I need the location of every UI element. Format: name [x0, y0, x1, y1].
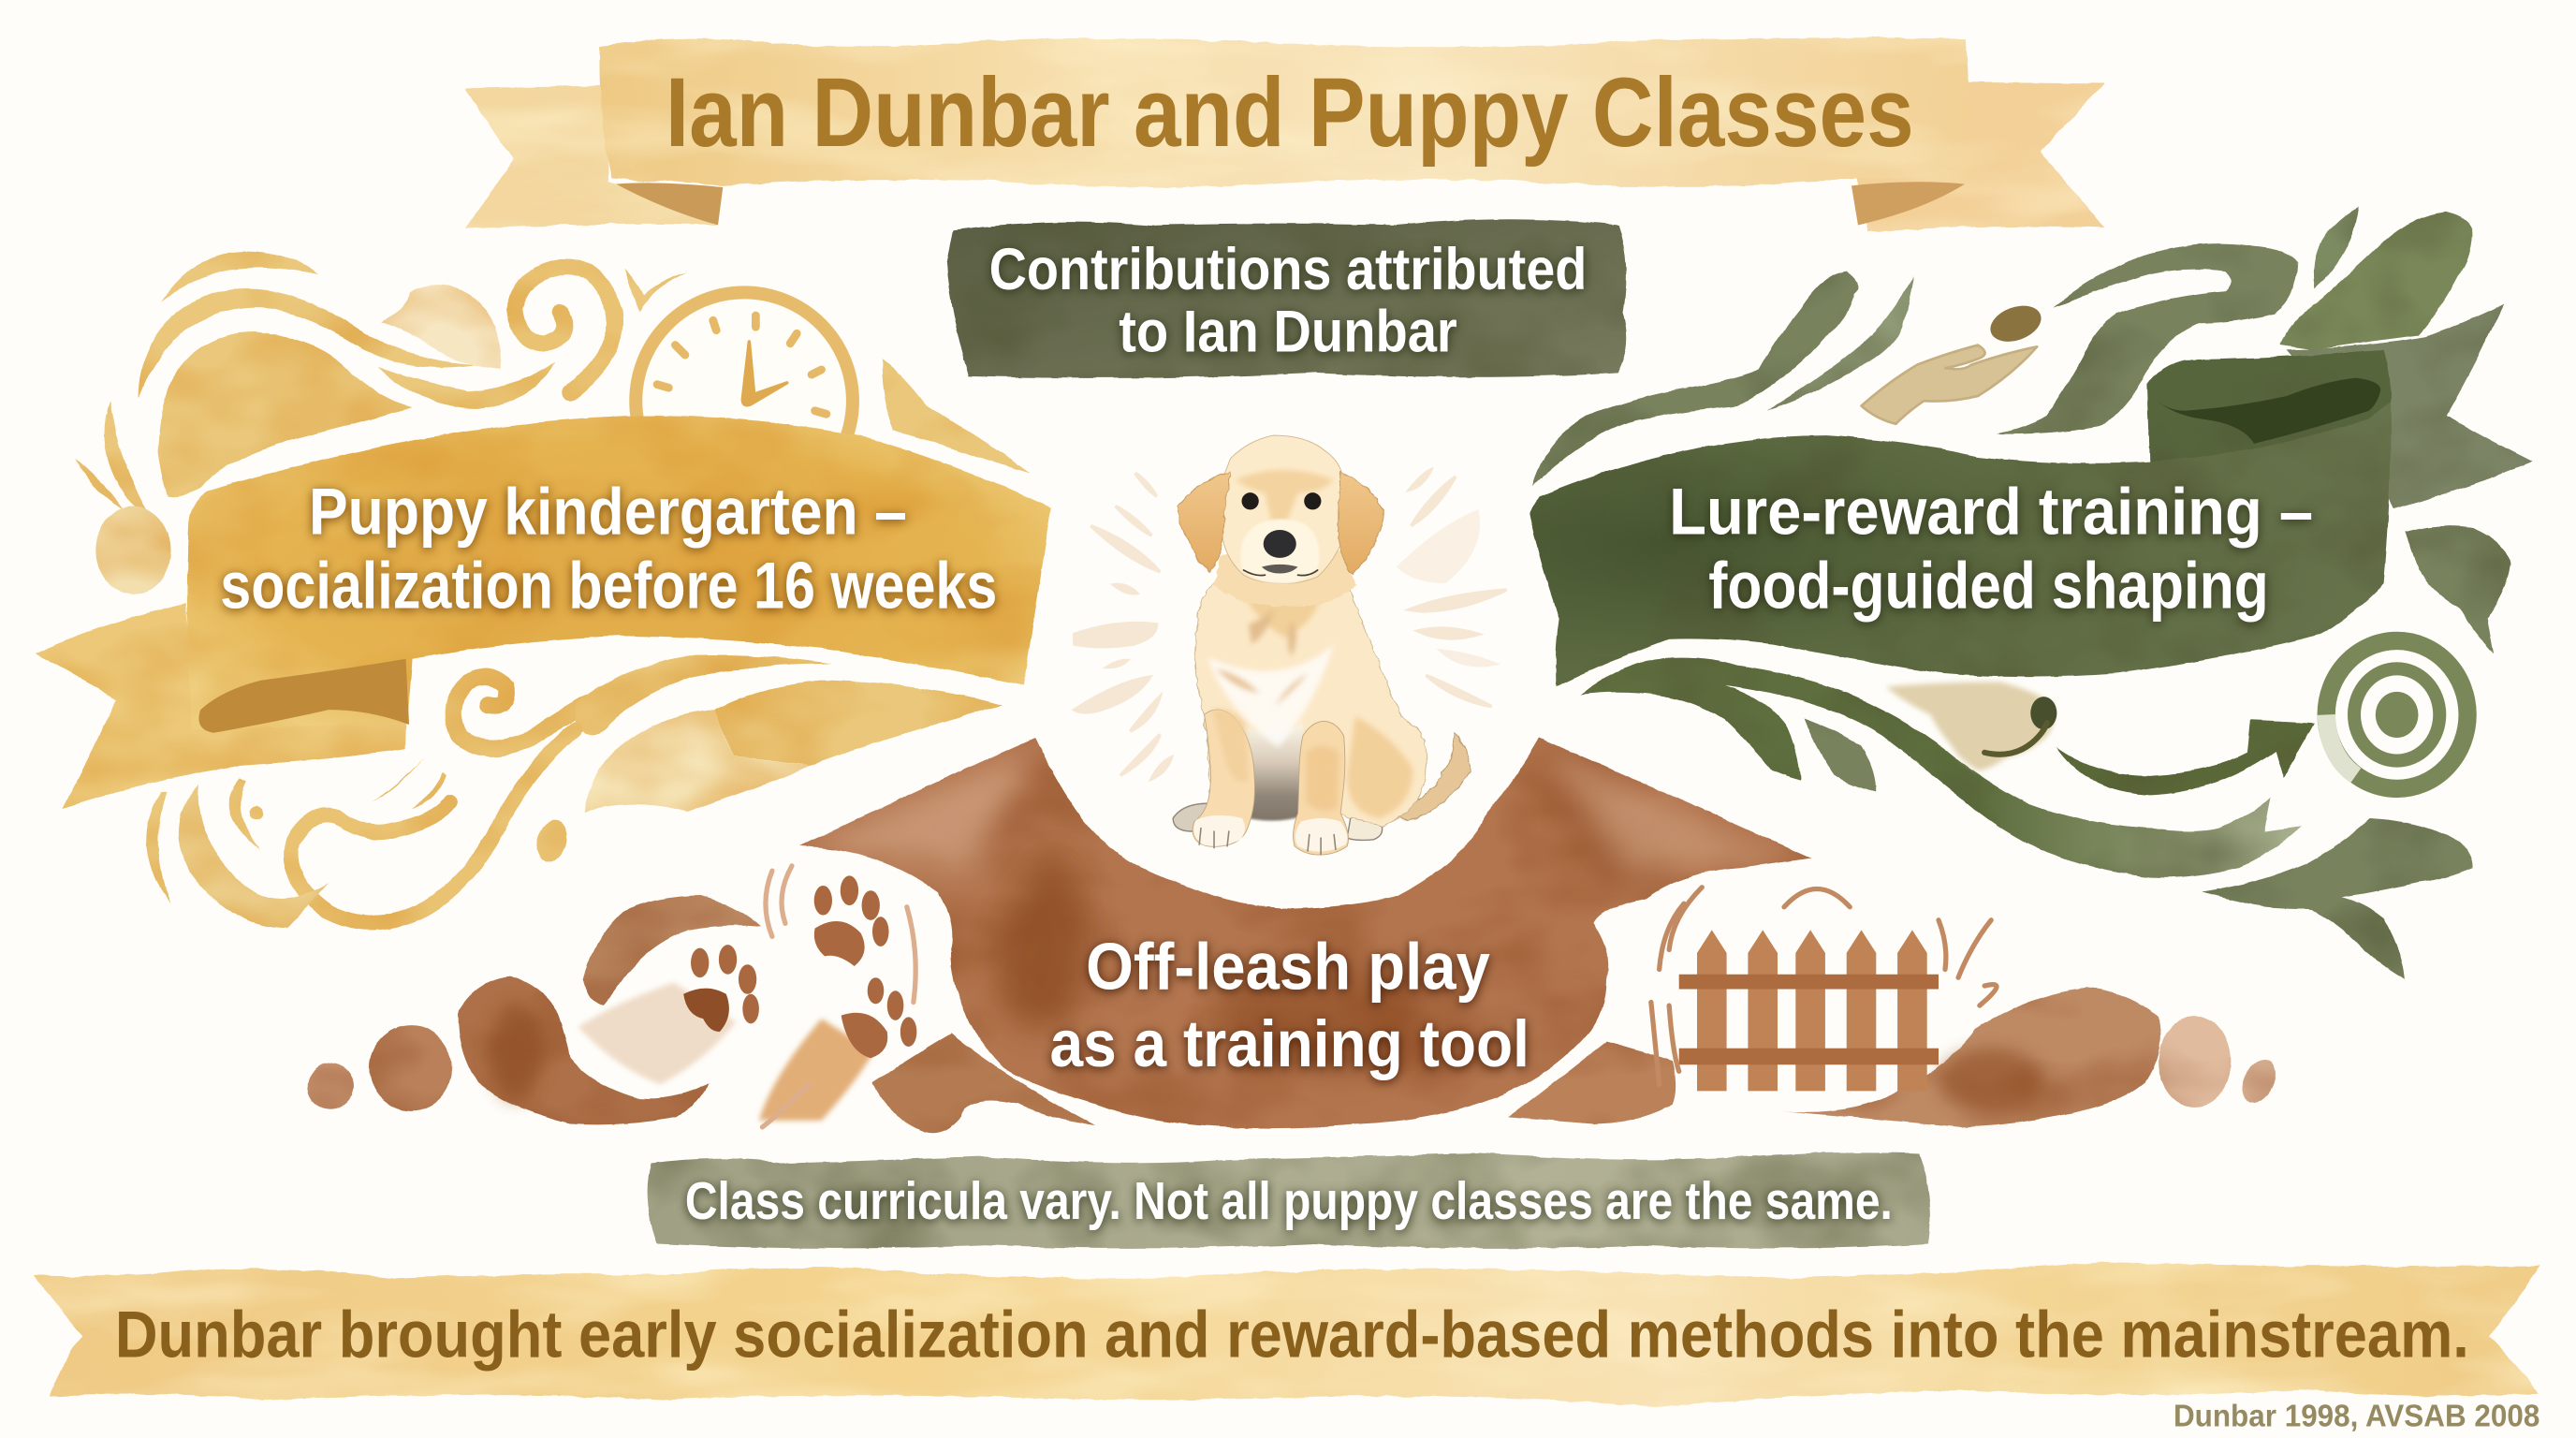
motion marks — [762, 866, 915, 1127]
puppy right leg — [1294, 721, 1349, 855]
contributions text: to Ian Dunbar — [1119, 300, 1457, 365]
puppy mouth — [1244, 570, 1318, 576]
right ribbon curl shadow — [2150, 378, 2380, 444]
title banner right tail — [1856, 82, 2104, 231]
puppy kindergarten text: Puppy kindergarten – — [309, 474, 907, 548]
title left curl — [616, 183, 723, 225]
paw print top — [814, 875, 889, 966]
puppy ears — [1178, 472, 1231, 572]
paw print left — [683, 945, 759, 1032]
golden decorative swirls — [76, 251, 1030, 929]
puppy forehead shading — [1236, 470, 1334, 522]
source attribution: Dunbar 1998, AVSAB 2008 — [2174, 1399, 2539, 1433]
puppy kindergarten text: socialization before 16 weeks — [220, 548, 997, 622]
puppy nose — [1264, 530, 1296, 558]
left ribbon tail — [35, 603, 407, 808]
brown stains — [805, 748, 1791, 1077]
off-leash text: as a training tool — [1050, 1006, 1530, 1080]
orange strip beneath paw — [759, 1019, 874, 1121]
note text: Class curricula vary. Not all puppy classes are the same. — [685, 1171, 1893, 1230]
icon: target — [2326, 640, 2467, 788]
right ribbon main — [1530, 401, 2391, 687]
puppy toe lines — [1199, 829, 1336, 855]
title banner left tail — [465, 85, 718, 228]
puppy kindergarten text — [220, 474, 997, 622]
radiating rays — [1075, 470, 1506, 779]
pale strip beneath paw — [578, 983, 736, 1084]
subtitle box: contributions — [946, 219, 1627, 378]
icon: clock — [636, 292, 853, 509]
puppy paws — [1193, 815, 1347, 852]
icon: paw prints — [683, 875, 916, 1058]
title banner main ribbon — [599, 38, 1975, 187]
panel: puppy kindergarten — [35, 251, 1051, 929]
puppy tail — [1393, 733, 1471, 822]
off-leash text — [1050, 930, 1530, 1080]
note olive wash — [647, 1152, 1930, 1248]
dark patch in right mound — [1939, 1049, 2043, 1114]
puppy left back paw — [1173, 803, 1212, 831]
title text: Ian Dunbar and Puppy Classes — [666, 58, 1914, 168]
puppy body — [1195, 580, 1427, 827]
conclusion banner — [33, 1262, 2539, 1406]
contributions olive wash — [946, 219, 1627, 378]
panel: lure-reward training — [1530, 207, 2532, 979]
lure-reward text: Lure-reward training – — [1669, 474, 2313, 548]
main brown wash — [800, 738, 1810, 1128]
icon: fence — [1679, 930, 1939, 1091]
puppy ruff — [1212, 552, 1357, 606]
left ribbon curl — [198, 659, 409, 733]
left ribbon main — [187, 416, 1051, 729]
icon: dog nose — [1886, 682, 2056, 770]
paw print bottom — [842, 977, 916, 1058]
lure-reward text — [1669, 474, 2313, 622]
right mound and grass — [1508, 988, 2282, 1127]
lure-reward text: food-guided shaping — [1708, 548, 2269, 622]
puppy haunch colour — [1347, 716, 1412, 818]
contributions text: Contributions attributed — [989, 237, 1587, 302]
puppy head — [1220, 435, 1345, 583]
puppy eyes — [1242, 492, 1321, 509]
puppy muzzle — [1240, 520, 1319, 583]
olive leaf swooshes — [1532, 207, 2510, 979]
puppy chin shadow — [1262, 565, 1298, 574]
puppy right back paw — [1347, 814, 1383, 840]
panel: off-leash play — [307, 738, 2282, 1133]
right ribbon upper curl — [2147, 350, 2391, 477]
contributions text — [989, 237, 1587, 365]
dark patch in left swoosh — [490, 1003, 542, 1101]
off-leash text: Off-leash play — [1086, 930, 1490, 1004]
puppy chest fur — [1208, 592, 1339, 811]
puppy right ear — [1339, 472, 1383, 575]
illustration: golden retriever puppy — [1075, 435, 1506, 855]
fence motion marks — [1651, 888, 1997, 1084]
right ribbon tail — [2287, 304, 2532, 509]
icon: hand with treat — [1862, 300, 2046, 424]
caveat note — [647, 1152, 1930, 1248]
puppy left leg — [1193, 710, 1255, 846]
left small blobs — [307, 895, 1096, 1133]
puppy belly shade — [1236, 723, 1303, 821]
conclusion ribbon — [33, 1262, 2539, 1406]
title banner — [465, 38, 2104, 231]
title right curl — [1852, 182, 1965, 225]
